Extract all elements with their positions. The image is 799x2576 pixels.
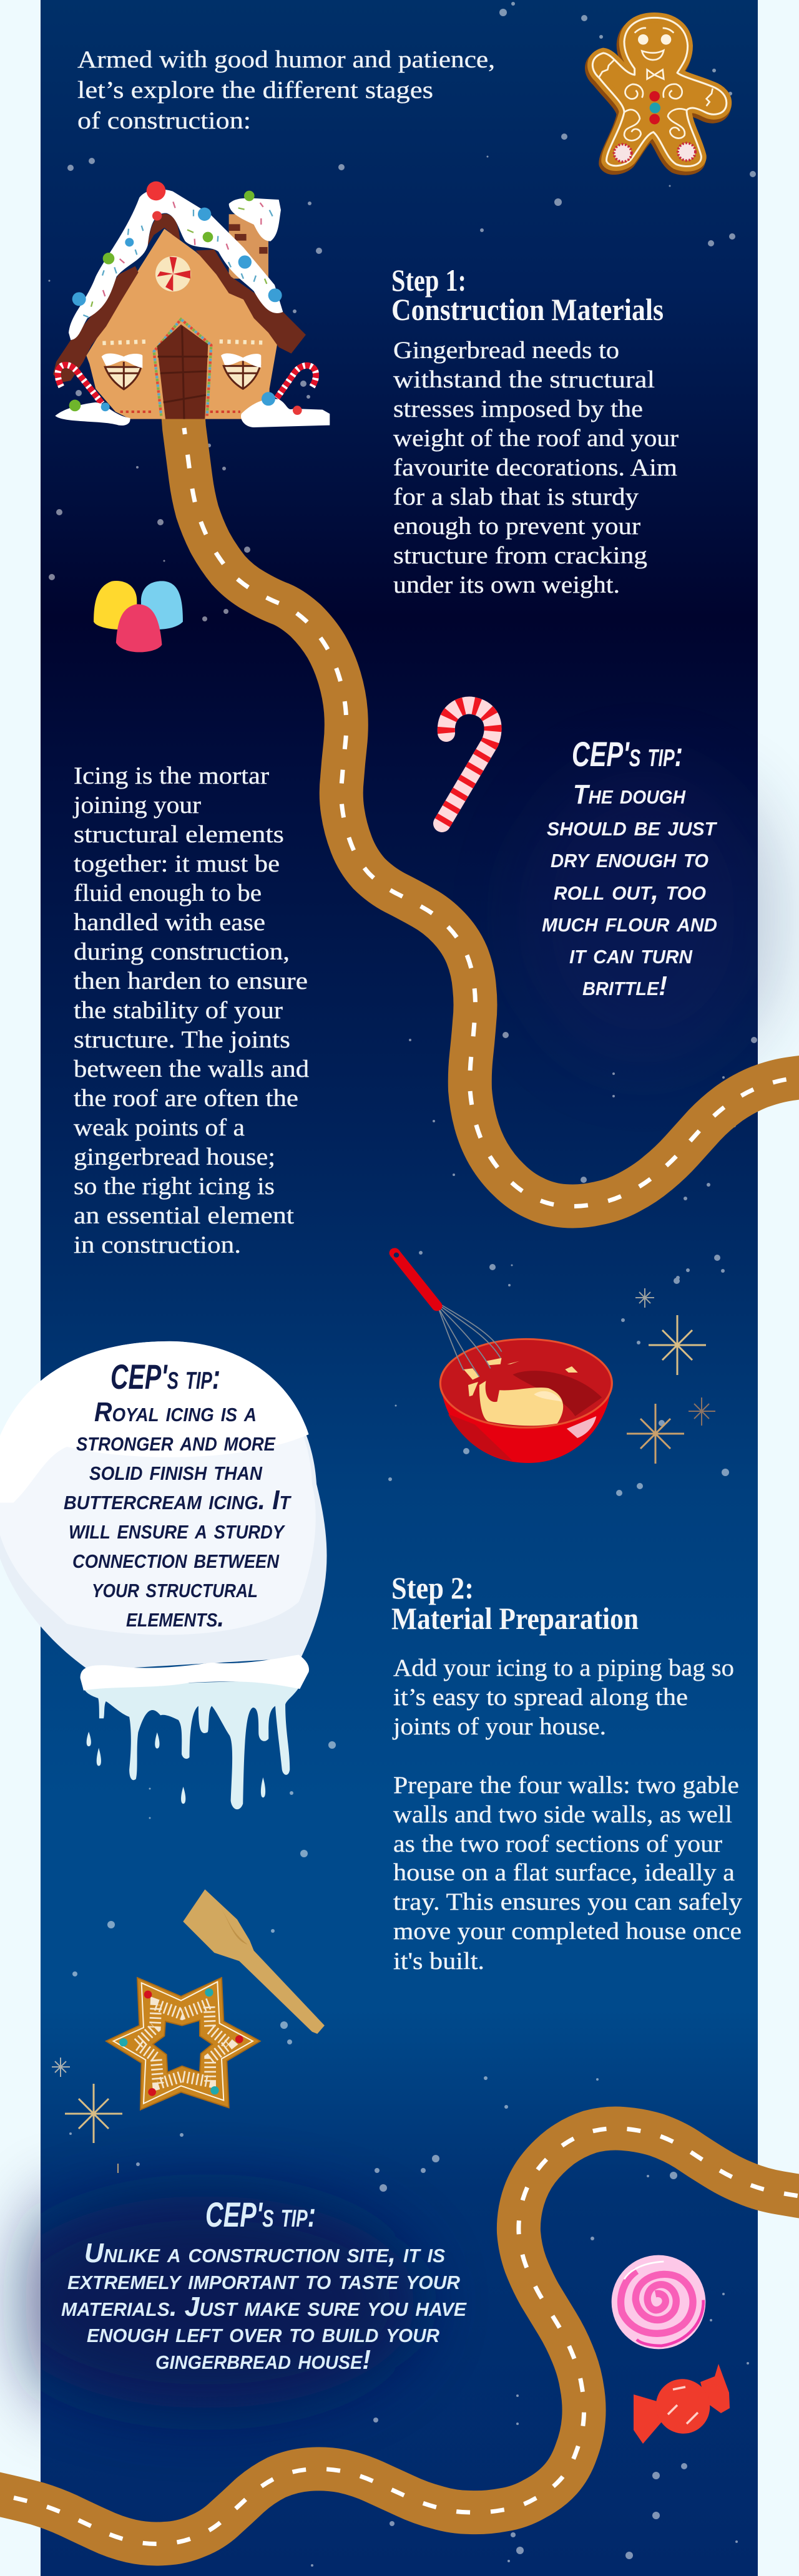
snow globe tip bubble [0,1341,327,1809]
step 2 body text: Prepare the four walls: two gable [393,1772,739,1799]
peppermint [155,256,191,291]
globe outer [0,1341,327,1670]
roof icing [69,189,283,340]
step 2 body text [392,1655,743,1975]
tip 1: dough: much flour and [542,907,717,938]
tip 2: royal icing: your structural [92,1573,258,1603]
window snow [102,353,261,368]
icicles [82,1679,303,1809]
icon: wooden spatula [183,1889,325,2034]
step 1 body text: favourite decorations. Aim [393,454,677,481]
step 2 body text: as the two roof sections of your [393,1830,722,1857]
step 1 body text: Gingerbread needs to [393,337,619,364]
icon: gumdrops [94,581,183,652]
step 2 body text: walls and two side walls, as well [393,1801,732,1828]
step 1 body text: under its own weight. [393,571,620,598]
tip 3: taste your materials: CEP's tip: [205,2195,316,2234]
chimney [229,214,268,279]
globe inner [0,1344,316,1635]
snow mounds [55,399,330,427]
icing paragraph: between the walls and [74,1056,310,1082]
roof trim [53,214,306,382]
snow cap [81,1655,309,1691]
icon: gingerbread house [53,182,330,427]
icon: pink swirl lollipop [612,2255,705,2349]
wall piping [102,341,267,412]
tip 3: taste your materials: extremely important to taste your [67,2265,461,2295]
tip 1: dough: The dough [573,779,686,810]
tip 1: dough [542,734,718,1001]
icon: star cookie [106,1978,260,2110]
tip 2: royal icing: buttercream icing. It [64,1485,292,1515]
step 2 body text: Add your icing to a piping bag so [393,1655,734,1681]
step 1 body text: for a slab that is sturdy [393,484,639,510]
step 1 body text: stresses imposed by the [393,396,643,422]
sprinkles [83,202,273,317]
globe top highlight [0,1341,309,1503]
step 1 body text: structure from cracking [393,542,647,569]
icing paragraph: structure. The joints [74,1026,290,1053]
icon: red wrapped candy [634,2364,730,2444]
intro text: let’s explore the different stages [77,77,433,104]
icing paragraph: joining your [72,792,201,819]
whisk wires [438,1305,502,1377]
bowl body [441,1389,611,1463]
step 2 body text: joints of your house. [392,1713,606,1740]
icing paragraph: so the right icing is [74,1173,275,1200]
tip 2: royal icing: solid finish than [89,1456,263,1486]
tip 2: royal icing [64,1357,292,1633]
shadow glow: third tip page edge [0,2164,41,2441]
icon: candy cane [442,706,493,824]
icing paragraph: in construction. [74,1232,241,1258]
intro text: of construction: [77,107,251,134]
shadow glow: behind third tip [0,2196,418,2408]
icing paragraph: gingerbread house; [74,1144,275,1170]
whisk handle [395,1253,437,1306]
icing paragraph: handled with ease [74,909,265,936]
step 2 heading: Material Preparation [391,1601,639,1636]
road: winding from house to right edge [183,412,799,1207]
shadow glow: first tip page edge [758,775,799,1059]
tip 2: royal icing: connection between [72,1543,280,1574]
step 1 body text [393,337,679,598]
step 1 body text: withstand the structural [393,366,655,393]
icing paragraph: the stability of your [74,997,283,1024]
tip 1: dough: it can turn [569,939,693,970]
tip 1: dough: roll out, too [554,875,706,906]
intro text [77,46,495,134]
tip 2: royal icing: will ensure a sturdy [69,1514,286,1545]
road: lower winding section [0,2129,799,2544]
tip 2: royal icing: stronger and more [76,1426,276,1457]
tip 3: taste your materials: enough left over to build your [87,2318,440,2348]
step 2 body text: move your completed house once [393,1918,742,1945]
icing paragraph: together: it must be [74,850,280,877]
step 1 heading: Step 1: [391,263,466,298]
icon: whisk and mixing bowl [394,1253,612,1463]
tip 3: taste your materials [61,2195,467,2375]
step 1 heading: Construction Materials [391,292,664,327]
candy balls [69,182,302,415]
tip 3: taste your materials: Unlike a construction site, it is [84,2238,445,2268]
candy canes [58,365,316,404]
step 2 heading: Step 2: [391,1570,474,1605]
windows [105,361,260,389]
shadow glow: behind first tip [518,767,768,1067]
decorative sparkles near bowl [52,1288,715,2173]
chimney icing [229,198,281,241]
tip 1: dough: brittle! [582,971,667,1001]
icing paragraph [72,762,310,1258]
tip 1: dough: should be just [547,811,718,842]
icing paragraph: weak points of a [74,1114,245,1141]
droplets [87,1732,265,1804]
tip 2: royal icing: elements. [126,1602,224,1633]
tip 1: dough: CEP's tip: [572,734,683,774]
icing paragraph: during construction, [74,938,290,965]
icing paragraph: the roof are often the [74,1085,298,1112]
step 2 body text: house on a flat surface, ideally a [393,1859,735,1886]
icing paragraph: then harden to ensure [74,968,308,994]
tip 3: taste your materials: gingerbread house! [155,2345,371,2375]
step 2 body text: it's built. [393,1948,484,1975]
icing paragraph: structural elements [74,821,284,848]
walls [86,229,278,419]
step 2 body text: it’s easy to spread along the [393,1684,688,1711]
step 1 heading [391,263,664,327]
icing paragraph: an essential element [74,1202,294,1229]
tip 3: taste your materials: materials. Just make sure you have [61,2292,467,2322]
bowl rim [440,1339,612,1427]
tip 2: royal icing: CEP's tip: [110,1357,220,1396]
tip 2: royal icing: Royal icing is a [94,1397,257,1427]
icon: gingerbread man [591,17,727,169]
icing paragraph: fluid enough to be [74,880,262,906]
step 2 heading [391,1570,639,1636]
dough [479,1381,563,1426]
step 1 body text: weight of the roof and your [393,425,679,452]
icing paragraph: Icing is the mortar [74,762,269,789]
step 2 body text: tray. This ensures you can safely [393,1888,743,1915]
intro text: Armed with good humor and patience, [77,46,495,73]
door [157,324,208,419]
door lights [154,319,211,416]
step 1 body text: enough to prevent your [393,513,640,540]
tip 1: dough: dry enough to [551,843,708,873]
